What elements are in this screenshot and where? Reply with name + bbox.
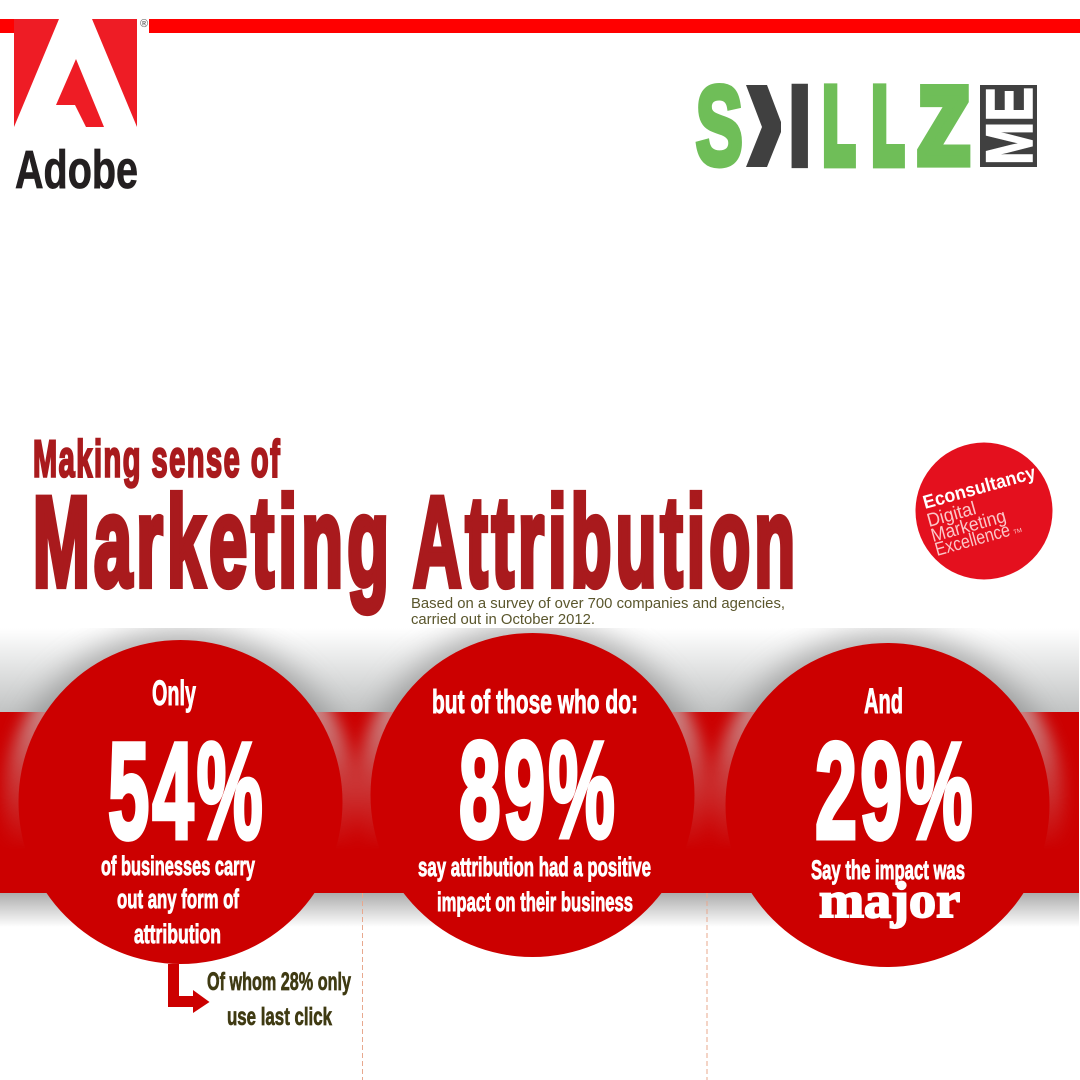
panel: circle 89%: [370, 633, 694, 957]
panel: circle 54%: Only: [152, 674, 196, 713]
callout: last click: Of whom 28% only: [207, 968, 351, 996]
panel: circle 54%: [18, 640, 342, 964]
subtitle: carried out in October 2012.: [411, 612, 595, 628]
callout: last click: [207, 968, 351, 1031]
dashed dividers: [362, 893, 707, 1080]
panel: circle 89%: 89%: [459, 714, 618, 867]
panel: circle 29%: And: [864, 682, 903, 721]
callout: last click: use last click: [227, 1003, 332, 1031]
logo: SkillzMe: L: [873, 68, 903, 185]
panel: circle 89%: but of those who do:: [432, 683, 638, 720]
logo: SkillzMe: S: [696, 63, 743, 188]
panel: circle 89%: impact on their business: [437, 887, 633, 917]
panel: circle 29%: 29%: [815, 715, 976, 868]
heading: Making sense of: Making sense of: [33, 430, 281, 488]
badge: Econsultancy: Marketing: [929, 506, 1009, 547]
logo: Adobe: Adobe: [15, 140, 138, 200]
shadow behind band and circles: [0, 628, 1079, 924]
subtitle: Based on a survey of over 700 companies and agencies,: [411, 596, 785, 612]
band glow around circles: [0, 712, 1070, 839]
panel: circle 29%: Say the impact was: [811, 855, 965, 885]
top red rule: [0, 19, 1080, 33]
logo: Adobe: ®: [140, 18, 148, 30]
panel: circle 54%: attribution: [134, 919, 221, 949]
heading: Marketing Attribution: Attribution: [413, 470, 799, 614]
subtitle: [405, 596, 785, 628]
heading: Marketing Attribution: Marketing: [33, 470, 393, 613]
panel: circle 29%: major: [819, 872, 960, 929]
badge: Econsultancy: Digital: [925, 498, 979, 532]
badge: Econsultancy: TM: [1013, 528, 1023, 536]
logo: Adobe: [14, 18, 148, 200]
logo: SkillzMe: [696, 63, 1046, 188]
red band: [0, 712, 1079, 893]
panel: circle 29%: [726, 643, 1050, 967]
badge: Econsultancy: [916, 442, 1052, 580]
logo: SkillzMe: I: [791, 69, 809, 185]
panel: circle 54%: out any form of: [117, 884, 239, 914]
logo: SkillzMe: ME: [972, 87, 1046, 165]
logo: SkillzMe: L: [824, 68, 854, 185]
heading: Marketing Attribution: [33, 470, 799, 614]
panel: circle 54%: 54%: [108, 715, 266, 868]
panel: circle 54%: of businesses carry: [101, 851, 255, 881]
panel: circle 89%: say attribution had a positive: [418, 852, 651, 882]
badge: Econsultancy: Econsultancy: [921, 462, 1039, 514]
logo: SkillzMe: Z: [919, 67, 968, 184]
arrow: [168, 964, 210, 1013]
badge: Econsultancy: Excellence: [933, 520, 1013, 561]
